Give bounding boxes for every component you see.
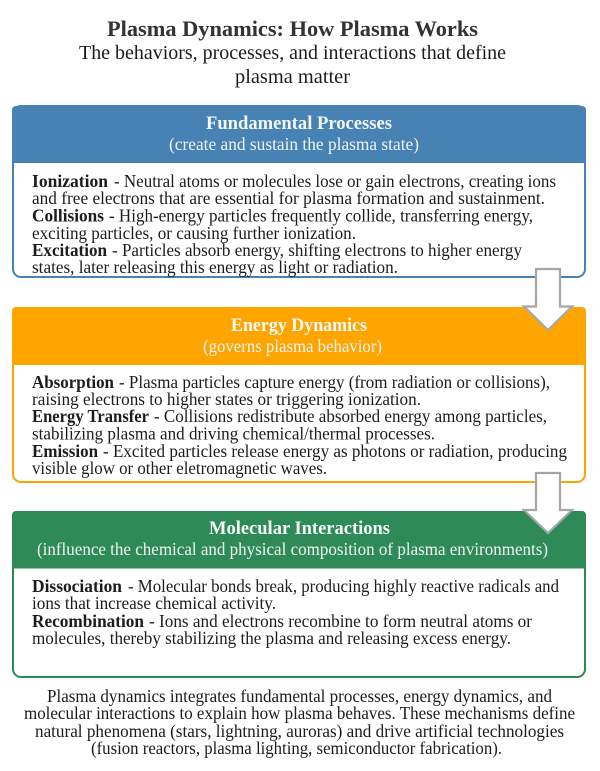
text: emission: Emission bbox=[32, 441, 98, 461]
text: excitation: states, later releasing this energy as light or radiation. bbox=[32, 257, 398, 277]
text: dissociation: ions that increase chemical activity. bbox=[32, 593, 276, 613]
header: energy dynamics: Energy Dynamics bbox=[231, 315, 367, 336]
header: fundamental processes: Fundamental Processes bbox=[206, 113, 392, 134]
text: ionization: Ionization bbox=[32, 171, 108, 191]
header: molecular interactions: (influence the chemical and physical composition of plasma environments) bbox=[37, 539, 548, 559]
subtitle: The behaviors, processes, and interactions that define bbox=[79, 42, 506, 64]
panel: energy dynamics bbox=[12, 307, 586, 482]
text: recombination bbox=[32, 611, 532, 648]
text: excitation: - Particles absorb energy, shifting electrons to higher energy bbox=[112, 240, 522, 260]
text: recombination: Recombination bbox=[32, 611, 144, 631]
text: recombination: - Ions and electrons recombine to form neutral atoms or bbox=[149, 611, 532, 631]
text: collisions: - High-energy particles frequently collide, transferring energy, bbox=[109, 206, 533, 226]
text: dissociation: - Molecular bonds break, producing highly reactive radicals and bbox=[128, 576, 559, 596]
text: excitation: Excitation bbox=[32, 240, 107, 260]
footer summary: Plasma dynamics integrates fundamental processes, energy dynamics, and bbox=[47, 686, 552, 706]
text: absorption: - Plasma particles capture energy (from radiation or collisions), bbox=[119, 372, 550, 392]
text: energy transfer bbox=[32, 406, 547, 444]
text: ionization: and free electrons that are essential for plasma formation and sustainment. bbox=[32, 188, 545, 208]
header: molecular interactions bbox=[12, 511, 586, 568]
text: emission: visible glow or other eletromagnetic waves. bbox=[32, 458, 327, 478]
header: fundamental processes bbox=[12, 106, 586, 163]
text: absorption: Absorption bbox=[32, 372, 114, 392]
header: energy dynamics bbox=[12, 307, 586, 365]
text: collisions: exciting particles, or causing further ionization. bbox=[32, 223, 356, 243]
subtitle: plasma matter bbox=[235, 66, 350, 88]
title: Plasma Dynamics: How Plasma Works bbox=[107, 16, 478, 41]
text: ionization: - Neutral atoms or molecules lose or gain electrons, creating ions bbox=[114, 171, 556, 191]
subtitle bbox=[79, 42, 506, 88]
text: energy transfer: - Collisions redistribute absorbed energy among particles, bbox=[154, 406, 547, 426]
text: emission: - Excited particles release energy as photons or radiation, producing bbox=[103, 441, 567, 461]
text: energy transfer: stabilizing plasma and driving chemical/thermal processes. bbox=[32, 424, 435, 444]
footer summary: molecular interactions to explain how plasma behaves. These mechanisms define bbox=[24, 703, 575, 723]
header: energy dynamics: (governs plasma behavior) bbox=[203, 336, 382, 356]
text: excitation bbox=[32, 240, 522, 277]
text: absorption bbox=[32, 372, 550, 409]
header: fundamental processes: (create and sustain the plasma state) bbox=[169, 134, 419, 154]
header: molecular interactions: Molecular Interactions bbox=[209, 518, 390, 539]
panel: fundamental processes bbox=[12, 106, 586, 277]
footer summary: natural phenomena (stars, lightning, auroras) and drive artificial technologies bbox=[35, 721, 564, 741]
text: absorption: raising electrons to higher states or triggering ionization. bbox=[32, 389, 421, 409]
text: energy transfer: Energy Transfer bbox=[32, 406, 149, 426]
footer summary bbox=[24, 686, 575, 758]
arrow: energy to molecular bbox=[524, 473, 572, 533]
text: recombination: molecules, thereby stabilizing the plasma and releasing excess energy. bbox=[32, 628, 511, 648]
text: collisions: Collisions bbox=[32, 206, 104, 226]
text: emission bbox=[32, 441, 567, 478]
arrow: fundamental to energy bbox=[524, 269, 572, 330]
panel: molecular interactions bbox=[12, 511, 586, 677]
text: dissociation: Dissociation bbox=[32, 576, 122, 596]
text: collisions bbox=[32, 206, 533, 243]
text: ionization bbox=[32, 171, 556, 208]
text: dissociation bbox=[32, 576, 559, 613]
footer summary: (fusion reactors, plasma lighting, semiconductor fabrication). bbox=[91, 738, 502, 758]
